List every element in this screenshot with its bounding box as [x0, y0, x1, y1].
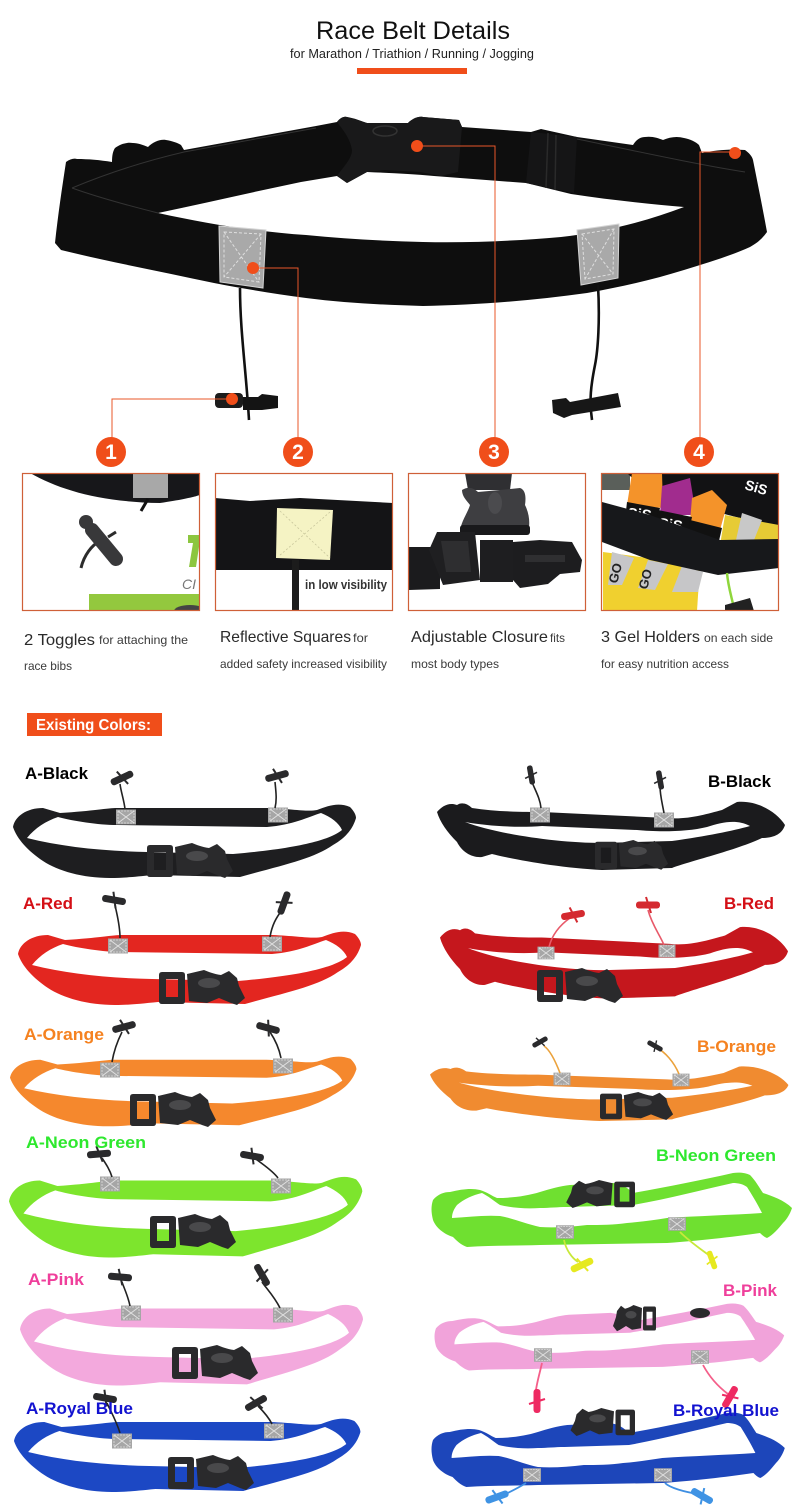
- caption: gel holders: for easy nutrition access: [601, 657, 729, 671]
- belt: A-Red: A-Red: [23, 894, 73, 913]
- section heading: existing colors: [27, 713, 162, 736]
- panel: gel holders photo: SiS: [657, 515, 684, 535]
- belt: A-Neon Green: [9, 1133, 362, 1258]
- callout line 4: [700, 147, 741, 440]
- caption: toggles: for attaching the: [99, 633, 188, 647]
- belt: B-Neon Green: [432, 1146, 792, 1277]
- belt: B-Orange: [430, 1033, 788, 1121]
- caption: reflective squares: [220, 629, 387, 671]
- panel: buckle photo: [408, 473, 586, 610]
- belt: A-Red: [18, 889, 361, 1005]
- caption: reflective squares: for: [353, 631, 368, 645]
- caption: adjustable closure: Adjustable Closure: [411, 629, 548, 646]
- belt: A-Orange: [10, 1016, 356, 1127]
- caption: gel holders: on each side: [704, 631, 773, 645]
- belt: B-Black: [437, 764, 785, 870]
- caption: adjustable closure: fits: [550, 631, 565, 645]
- belt: B-Orange: B-Orange: [697, 1037, 776, 1056]
- belt: A-Black: A-Black: [25, 764, 89, 783]
- belt: B-Red: [440, 894, 788, 1003]
- panel: toggle photo: [22, 473, 206, 617]
- number badge 2: [283, 437, 313, 467]
- belt: A-Royal Blue: [14, 1388, 360, 1492]
- reflective square right: [577, 224, 619, 285]
- subtitle: for Marathon / Triathion / Running / Jogging: [290, 46, 534, 61]
- belt: B-Black: B-Black: [708, 772, 772, 791]
- belt: B-Royal Blue: B-Royal Blue: [673, 1401, 779, 1420]
- panel: toggle photo: CI: [182, 576, 196, 592]
- belt: B-Pink: B-Pink: [723, 1281, 778, 1300]
- caption: gel holders: 3 Gel Holders: [601, 629, 700, 646]
- caption: adjustable closure: [411, 629, 565, 671]
- section heading: existing colors: Existing Colors:: [36, 717, 151, 734]
- number badge 3: 3: [488, 441, 500, 464]
- panel: gel holders photo: SiS: [627, 505, 652, 525]
- number badge 1: 1: [105, 441, 117, 464]
- belt: A-Royal Blue: A-Royal Blue: [26, 1399, 133, 1418]
- number badge 4: 4: [693, 441, 705, 464]
- belt: B-Pink: [435, 1281, 784, 1413]
- number badge 1: [96, 437, 126, 467]
- caption: toggles: race bibs: [24, 659, 72, 673]
- belt: A-Pink: A-Pink: [28, 1270, 85, 1289]
- caption: reflective squares: Reflective Squares: [220, 629, 351, 646]
- belt: A-Black: [13, 764, 356, 878]
- main belt photo: [55, 117, 767, 420]
- callout line 2: [247, 262, 298, 440]
- caption: toggles: 2 Toggles: [24, 632, 95, 649]
- panel: reflective square photo: [215, 474, 393, 612]
- belt: B-Royal Blue: [432, 1401, 785, 1507]
- title: Race Belt Details: [316, 17, 510, 45]
- title underline bar: [357, 68, 467, 74]
- number badge 3: [479, 437, 509, 467]
- left cord and toggle: [215, 288, 278, 420]
- right cord and toggle: [552, 285, 621, 420]
- caption: toggles: [24, 632, 188, 673]
- panel: gel holders photo: SiS: [743, 477, 769, 498]
- caption: adjustable closure: most body types: [411, 657, 499, 671]
- number badge 4: [684, 437, 714, 467]
- belt: A-Pink: [20, 1261, 363, 1386]
- number badge 2: 2: [292, 441, 304, 464]
- caption: reflective squares: added safety increased visibility: [220, 657, 387, 671]
- panel: gel holders photo: [602, 473, 779, 611]
- belt: B-Red: B-Red: [724, 894, 774, 913]
- callout line 1: [112, 393, 238, 440]
- belt: A-Neon Green: A-Neon Green: [26, 1133, 146, 1152]
- belt: B-Neon Green: B-Neon Green: [656, 1146, 776, 1165]
- callout line 3: [411, 140, 495, 440]
- panel: gel holders photo: GO: [635, 567, 655, 591]
- reflective square left: [219, 226, 266, 288]
- panel: reflective square photo: in low visibility: [305, 577, 388, 592]
- caption: gel holders: [601, 629, 773, 671]
- panel: gel holders photo: GO: [605, 561, 625, 585]
- belt: A-Orange: A-Orange: [24, 1025, 104, 1044]
